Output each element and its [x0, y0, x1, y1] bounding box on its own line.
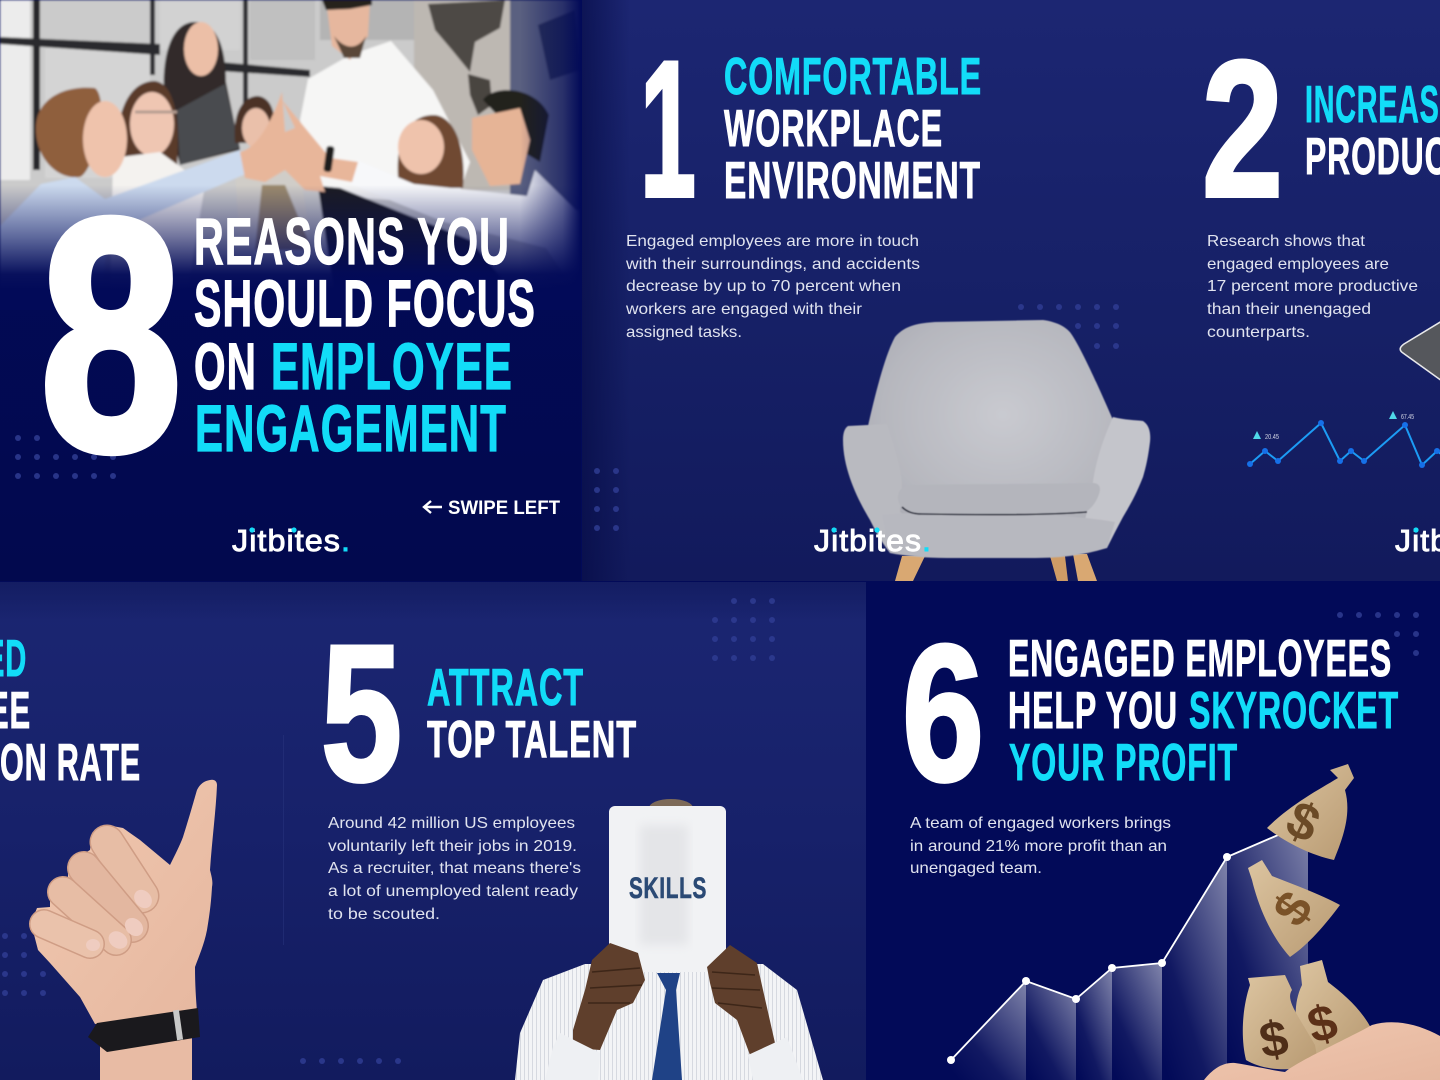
title: ENGAGEMENT [195, 391, 507, 465]
body text: reason 6: in around 21% more profit than an [910, 838, 1167, 855]
bag right [1296, 960, 1372, 1058]
icon: thumbs up hand [31, 780, 217, 1080]
body text: reason 2: counterparts. [1207, 324, 1310, 341]
body text: reason 1 [625, 233, 920, 341]
swipe left prompt: SWIPE LEFT [448, 498, 560, 519]
dots: panel 1 top [1018, 304, 1119, 349]
bag left: $ [1255, 1009, 1292, 1069]
body text: reason 6: A team of engaged workers brings [910, 815, 1171, 832]
photo: team high five [0, 0, 579, 274]
number 1: 1 [640, 21, 696, 238]
right man [391, 88, 574, 252]
line chart: productivity: 20.45 [1265, 434, 1279, 441]
heading: engaged employees skyrocket profit [1008, 630, 1399, 792]
back woman [164, 22, 240, 165]
swipe left prompt [422, 500, 560, 514]
bag middle: $ [1262, 881, 1324, 936]
dots: panel 4 left [2, 933, 46, 996]
panel: reasons 1 and 2 [582, 0, 1440, 581]
body text: reason 5: voluntarily left their jobs in 2019. [328, 838, 577, 855]
body text: reason 5 [328, 815, 581, 923]
body text: reason 1: Engaged employees are more in touch [626, 233, 919, 250]
logo: Jitbites. [232, 523, 351, 558]
logo [232, 527, 348, 552]
bag top [1267, 764, 1354, 860]
body text: reason 2 [1207, 233, 1418, 341]
heading: attract top talent [427, 668, 636, 758]
heading: improved employee retention rate [0, 640, 140, 781]
bag right: $ [1302, 993, 1343, 1054]
icon: money bags in hand [1204, 764, 1440, 1080]
body text: reason 5: As a recruiter, that means there's [328, 860, 581, 877]
dots: panel 5 bottom [300, 1058, 401, 1064]
title: ON [194, 329, 257, 403]
icon: man holding skills tablet [515, 799, 823, 1080]
icon: man holding skills tablet: SKILLS [629, 872, 707, 905]
body text: reason 1: with their surroundings, and accidents [625, 256, 920, 273]
body text: reason 5: a lot of unemployed talent ready [328, 883, 578, 900]
dots: cover [15, 435, 116, 479]
heading: increased productivity [1306, 85, 1440, 175]
title: SHOULD FOCUS [194, 266, 536, 340]
heading: engaged employees skyrocket profit: HELP YOU [1008, 682, 1178, 740]
body text: reason 6: unengaged team. [910, 860, 1042, 877]
body text: reason 2: Research shows that [1207, 233, 1366, 250]
hand [1204, 1022, 1440, 1080]
right woman [318, 114, 494, 273]
body text: reason 2: engaged employees are [1207, 256, 1389, 273]
line chart: productivity [1247, 411, 1440, 468]
standing man [300, 0, 470, 205]
dots: panel 5 top [712, 598, 775, 661]
line chart: productivity: 67.45 [1401, 414, 1414, 421]
bag top: $ [1278, 790, 1328, 855]
dots: panel 6 top [1337, 612, 1419, 656]
big number 8: 8 [40, 150, 182, 519]
body text: reason 1: decrease by up to 70 percent when [626, 278, 901, 295]
body text: reason 6 [910, 815, 1171, 877]
icon: grey armchair [843, 320, 1150, 581]
dots: panel 1 left [594, 468, 619, 531]
center woman [235, 96, 312, 250]
heading: attract top talent: ATTRACT [427, 659, 584, 717]
panel: cover [0, 0, 581, 581]
number 5: 5 [321, 605, 402, 822]
body text: reason 5: to be scouted. [328, 906, 440, 923]
icon: tablet edge [1400, 321, 1440, 381]
glasses woman [112, 80, 204, 259]
bag middle [1248, 860, 1340, 957]
panel: reason 6 [867, 582, 1440, 1080]
heading: improved employee retention rate: ON RATE [0, 734, 141, 792]
title [194, 217, 534, 452]
body text: reason 5: Around 42 million US employees [328, 815, 575, 832]
title: REASONS YOU [194, 204, 510, 278]
panel: reasons 4 and 5 [0, 582, 866, 1080]
body text: reason 1: assigned tasks. [626, 324, 742, 341]
number 2: 2 [1202, 21, 1283, 238]
hands [240, 92, 358, 192]
heading: comfortable workplace environment: ENVIRONMENT [724, 152, 981, 210]
body text: reason 1: workers are engaged with their [625, 301, 863, 318]
laughing woman [0, 86, 245, 257]
growth line chart [947, 822, 1308, 1080]
logo [814, 527, 928, 552]
heading: comfortable workplace environment: WORKPLACE [724, 100, 943, 158]
body text: reason 2: than their unengaged [1207, 301, 1371, 318]
logo: Jitbites. [814, 523, 932, 558]
heading: attract top talent: TOP TALENT [427, 711, 637, 769]
heading: comfortable workplace environment: COMFORTABLE [724, 48, 982, 106]
number 6: 6 [902, 605, 984, 822]
heading: comfortable workplace environment [724, 57, 980, 199]
title: EMPLOYEE [271, 329, 513, 403]
body text: reason 2: 17 percent more productive [1207, 278, 1418, 295]
bag left [1243, 975, 1318, 1069]
heading: engaged employees skyrocket profit: YOUR PROFIT [1009, 734, 1238, 792]
